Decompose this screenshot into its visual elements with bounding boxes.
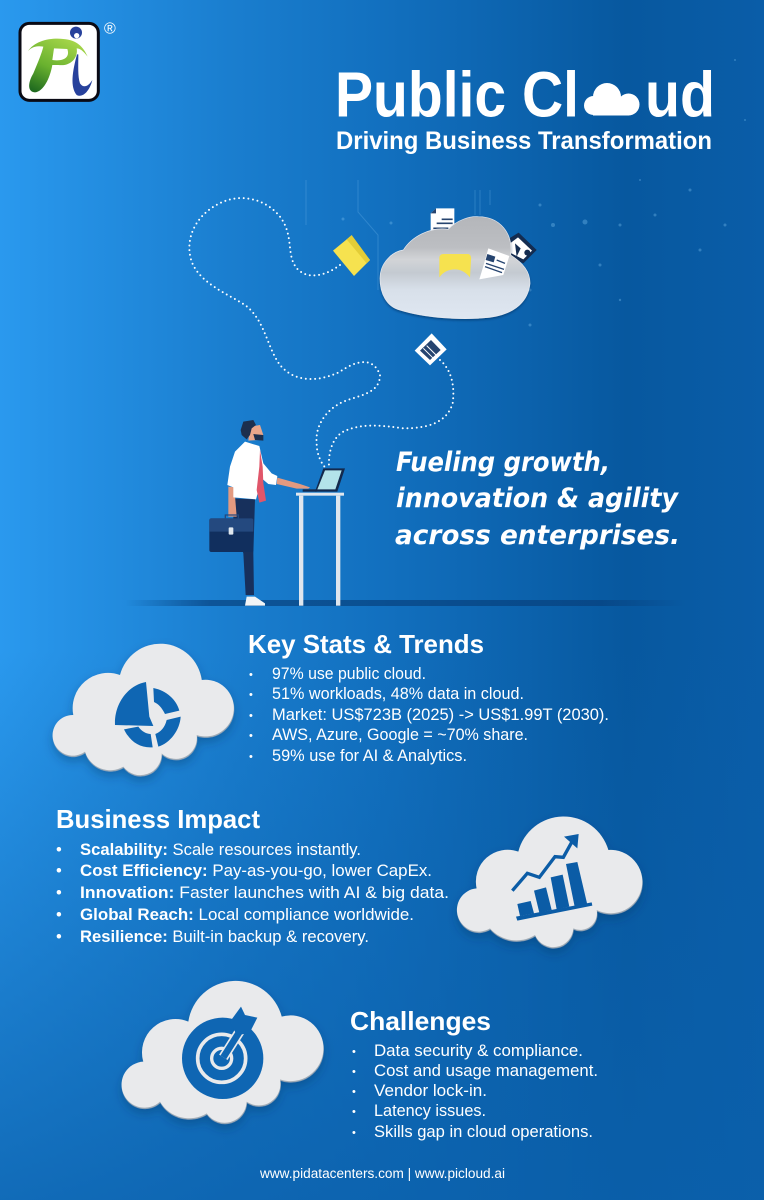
icon: chat document — [479, 248, 509, 279]
icon: flying document — [415, 333, 447, 365]
hero cloud graphic — [189, 198, 537, 467]
icon: photo — [507, 233, 537, 263]
logo letter P — [28, 39, 88, 92]
tagline: across enterprises. — [395, 520, 680, 551]
bullet list: • — [56, 928, 62, 946]
panel: business impact — [56, 804, 449, 946]
bullet list: • — [352, 1106, 356, 1118]
bullet list: • — [56, 906, 62, 924]
icon: folder in cloud — [439, 254, 471, 277]
registered mark: ® — [104, 21, 116, 38]
bullet list: Data security & compliance. — [374, 1042, 583, 1060]
bullet list: Latency issues. — [374, 1102, 486, 1120]
dotted data paths — [189, 198, 453, 467]
bullet list: • — [352, 1066, 356, 1078]
briefcase — [209, 518, 253, 552]
icon: yellow folder — [333, 235, 370, 276]
icon: document top — [431, 208, 454, 233]
heading: Key Stats & Trends — [248, 629, 484, 659]
bullet list: 51% workloads, 48% data in cloud. — [272, 685, 524, 703]
tagline: innovation & agility — [396, 483, 679, 514]
bullet list: Innovation: Faster launches with AI & big data. — [80, 884, 449, 902]
tagline — [395, 447, 680, 551]
bullet list: Resilience: Built-in backup & recovery. — [80, 928, 369, 946]
logo — [20, 21, 116, 100]
cloud icon: pie chart — [53, 644, 234, 775]
desk — [296, 493, 344, 606]
bullet list: • — [56, 841, 62, 859]
panel: challenges — [350, 1006, 598, 1141]
bullet list — [56, 841, 449, 946]
bullet list: Market: US$723B (2025) -> US$1.99T (2030). — [272, 706, 609, 724]
bullet list: Skills gap in cloud operations. — [374, 1123, 593, 1141]
cloud icon: target — [122, 981, 323, 1123]
bullet list: • — [249, 751, 253, 763]
bullet list: • — [352, 1127, 356, 1139]
bullet list: • — [249, 730, 253, 742]
heading: Challenges — [350, 1006, 491, 1036]
bullet list: AWS, Azure, Google = ~70% share. — [272, 726, 528, 744]
bullet list — [352, 1042, 598, 1141]
bullet list: Scalability: Scale resources instantly. — [80, 841, 361, 859]
bullet list: Global Reach: Local compliance worldwide. — [80, 906, 414, 924]
bullet list: • — [249, 710, 253, 722]
cloud icon: growth chart — [457, 816, 642, 947]
bullet list: 59% use for AI & Analytics. — [272, 747, 467, 765]
bullet list: • — [56, 884, 62, 902]
head — [248, 425, 263, 441]
icon: cloud letter O — [584, 83, 640, 116]
bullet list: • — [352, 1046, 356, 1058]
bullet list — [249, 665, 609, 765]
logo letter i — [70, 27, 92, 96]
arms — [277, 478, 310, 489]
shoe — [245, 597, 265, 606]
bullet list: 97% use public cloud. — [272, 665, 426, 683]
laptop — [303, 468, 345, 492]
tie — [257, 450, 266, 503]
bullet list: • — [56, 862, 62, 880]
shirt — [227, 442, 277, 499]
man at desk — [209, 420, 345, 606]
bullet list: Cost and usage management. — [374, 1062, 598, 1080]
bullet list: Vendor lock-in. — [374, 1082, 487, 1100]
bullet list: Cost Efficiency: Pay-as-you-go, lower CapEx. — [80, 862, 432, 880]
title: ud — [645, 58, 715, 130]
big cloud — [380, 217, 530, 319]
bullet list: • — [249, 669, 253, 681]
tagline: Fueling growth, — [396, 447, 610, 478]
bullet list: • — [352, 1086, 356, 1098]
heading: Business Impact — [56, 804, 260, 834]
legs — [233, 498, 255, 595]
title: Public Cl — [335, 58, 579, 130]
footer: www.pidatacenters.com | www.picloud.ai — [259, 1166, 505, 1181]
panel: key stats — [248, 629, 609, 765]
subtitle: Driving Business Transformation — [336, 127, 712, 155]
bullet list: • — [249, 689, 253, 701]
